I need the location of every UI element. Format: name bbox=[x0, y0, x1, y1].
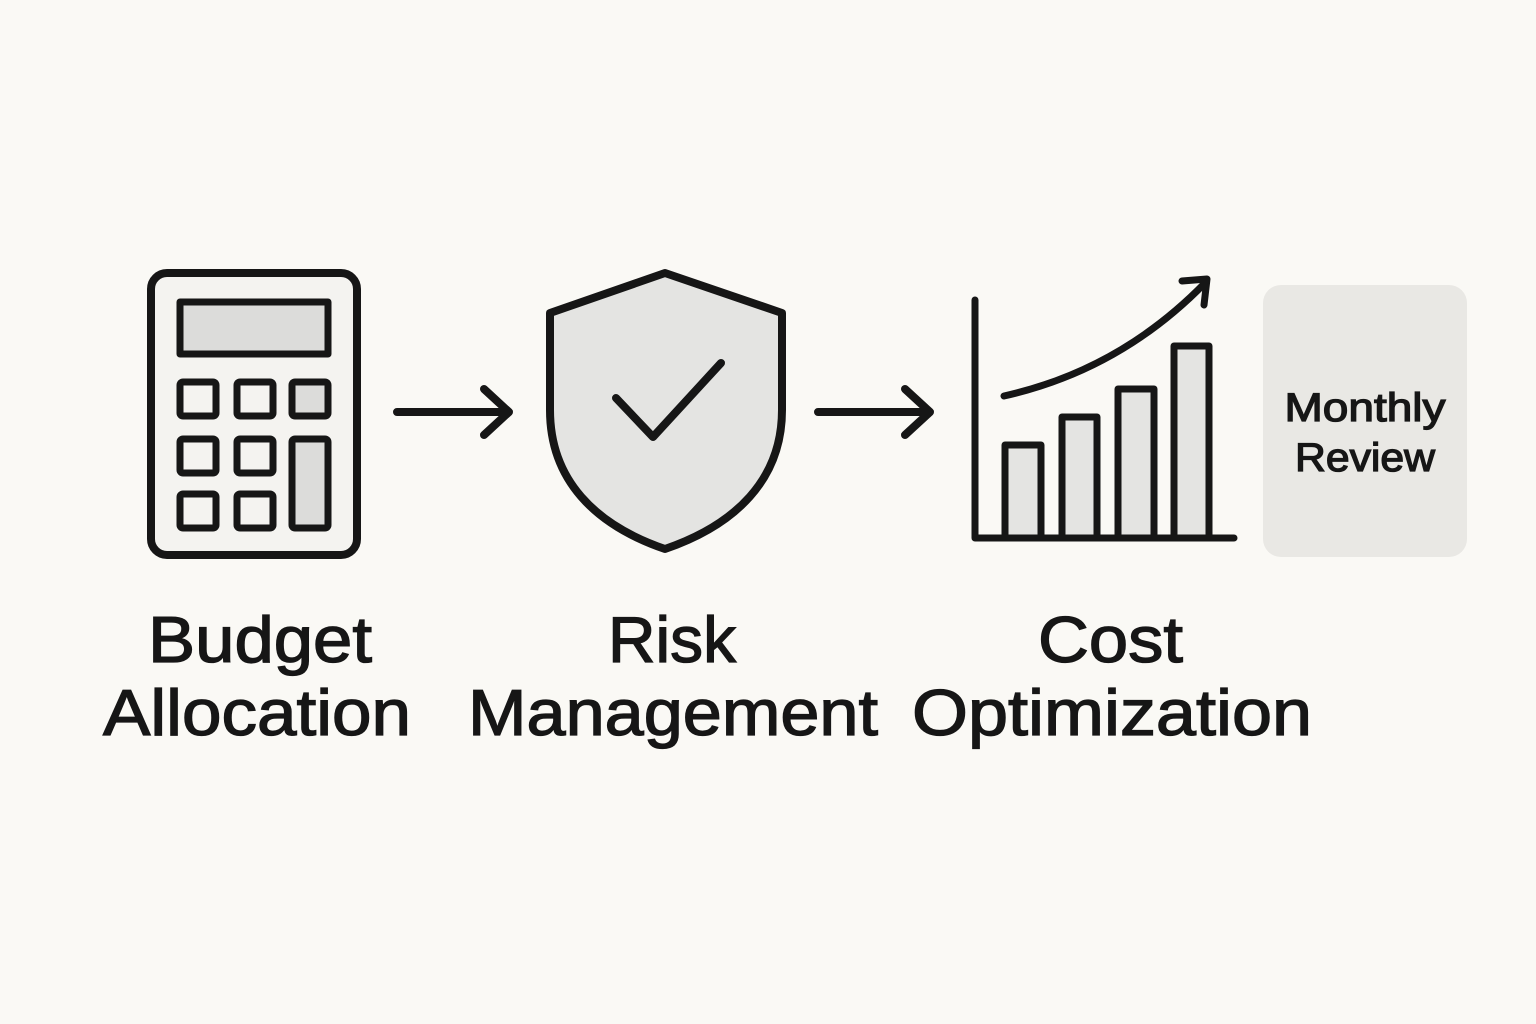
label: budget allocation bbox=[103, 603, 411, 749]
icon: bar chart with trend arrow bbox=[975, 279, 1234, 538]
panel: monthly review: Monthly bbox=[1284, 386, 1446, 430]
label: cost optimization bbox=[912, 603, 1312, 749]
label: budget allocation: Budget bbox=[148, 603, 372, 676]
icon: shield with check bbox=[550, 273, 782, 549]
label: cost optimization: Cost bbox=[1038, 603, 1183, 676]
panel: monthly review bbox=[1263, 285, 1467, 557]
label: risk management: Management bbox=[468, 676, 878, 749]
label: budget allocation: Allocation bbox=[103, 676, 411, 749]
arrow 1 bbox=[397, 389, 509, 435]
arrow 2 bbox=[818, 389, 930, 435]
label: risk management: Risk bbox=[608, 603, 736, 676]
label: risk management bbox=[468, 603, 878, 749]
icon: calculator bbox=[151, 273, 357, 555]
panel: monthly review: Review bbox=[1295, 436, 1435, 480]
label: cost optimization: Optimization bbox=[912, 676, 1312, 749]
